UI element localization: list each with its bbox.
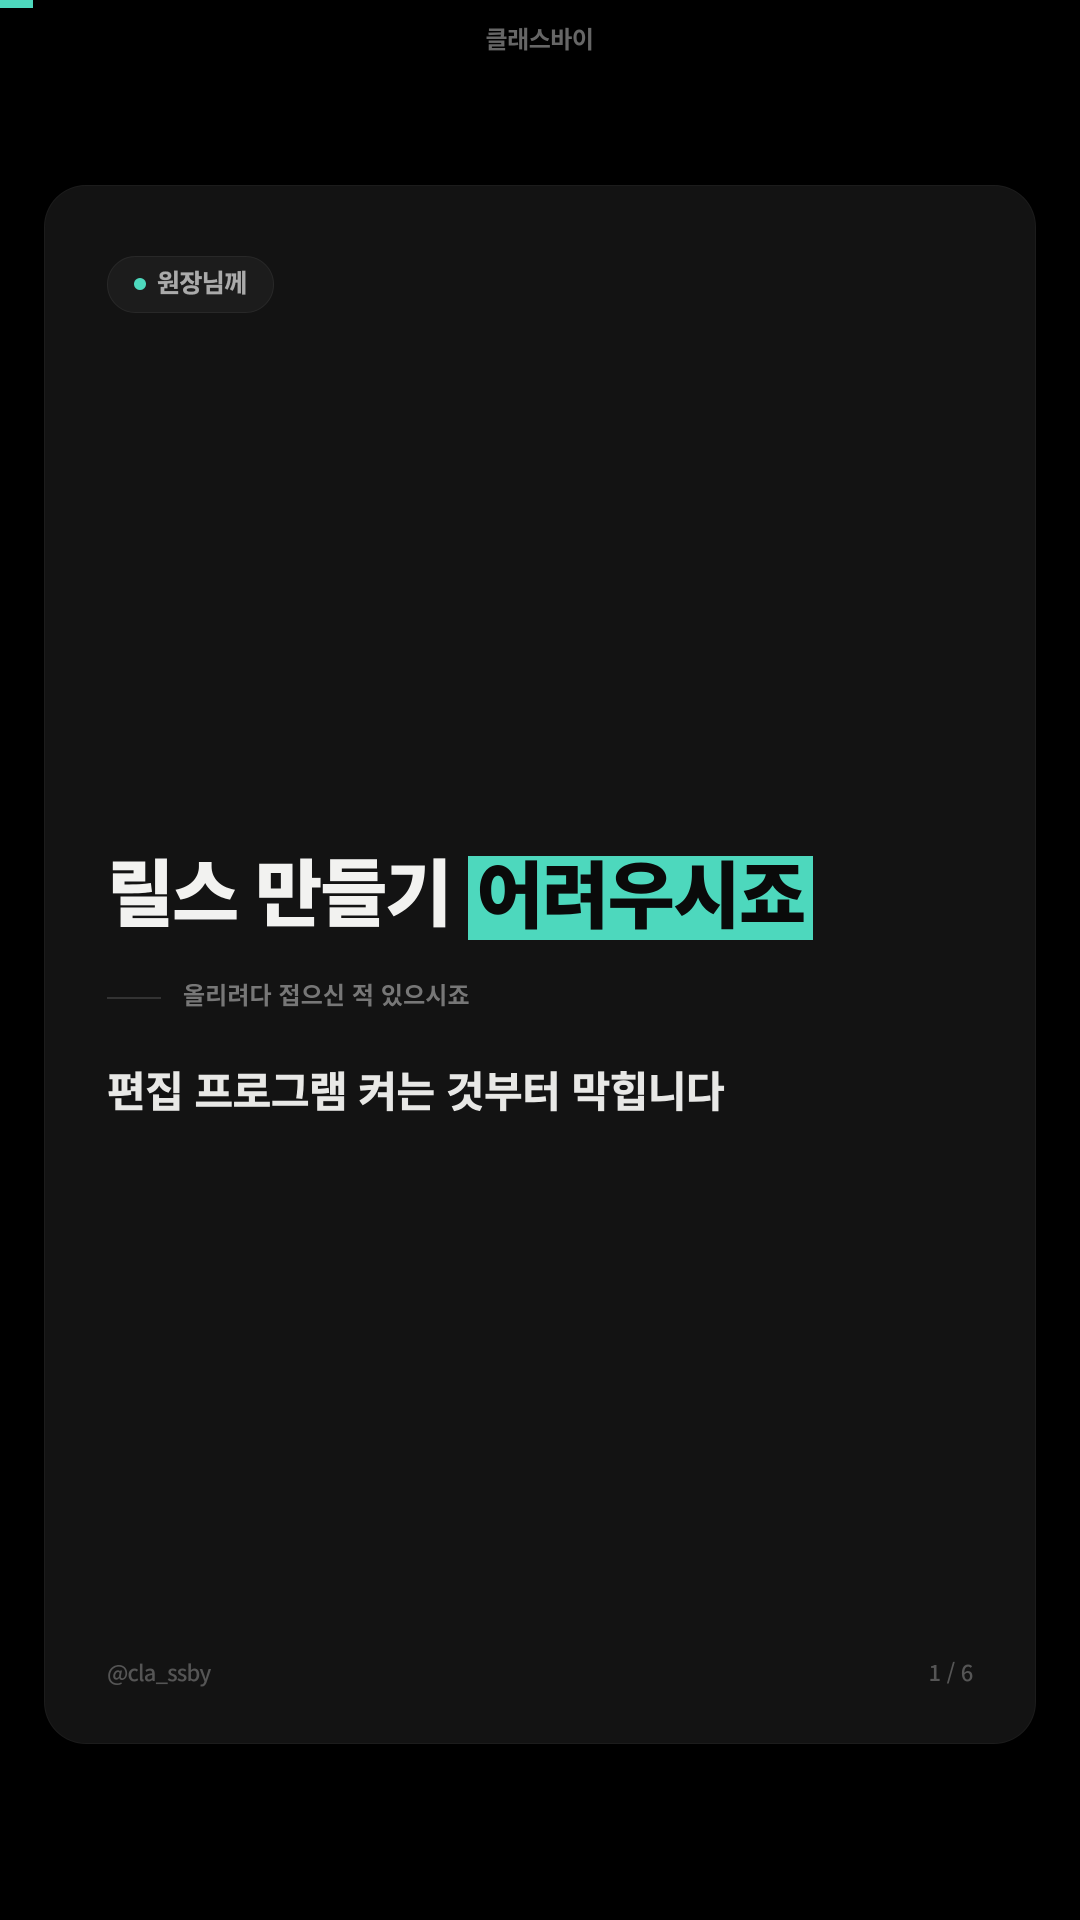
badge label: 원장님께 (157, 264, 247, 300)
subtitle: 올리려다 접으신 적 있으시죠 (183, 976, 470, 1011)
progress bar (0, 0, 33, 8)
heading highlight: 어려우시죠 (476, 838, 805, 944)
heading: 릴스 만들기 (107, 836, 450, 942)
brand name: 클래스바이 (486, 20, 593, 55)
panel: main card (44, 185, 1036, 1744)
subtitle rule (107, 997, 161, 999)
body statement: 편집 프로그램 켜는 것부터 막힙니다 (107, 1059, 724, 1120)
footer handle: @cla_ssby (107, 1656, 210, 1688)
page number: 1 / 6 (928, 1656, 973, 1688)
icon: badge dot (134, 278, 146, 290)
badge (107, 256, 274, 313)
